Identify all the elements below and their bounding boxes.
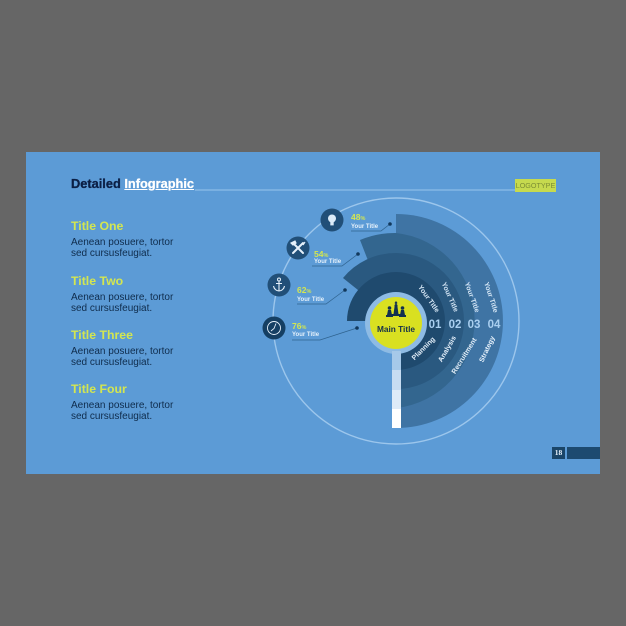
logotype badge <box>515 179 556 192</box>
heading: Detailed Infographic <box>71 176 194 191</box>
text block: title one: Title One <box>71 219 123 233</box>
ring names: Planning <box>411 336 437 362</box>
callout 54%: 54% <box>314 249 328 259</box>
ring numbers: 03 <box>468 319 480 331</box>
text block: title three: Aenean posuere, tortor <box>71 346 173 357</box>
callout 54% <box>312 249 360 266</box>
ring 04 <box>396 214 503 428</box>
callout 62%: 62% <box>297 285 311 295</box>
icon: light bulb <box>320 208 344 232</box>
center label: Main Title <box>377 324 415 334</box>
text block: title one: Aenean posuere, tortor <box>71 237 173 248</box>
ring names <box>411 335 497 375</box>
text block: title two: sed cursusfeugiat. <box>71 303 152 314</box>
logotype badge: LOGOTYPE <box>516 181 555 190</box>
ring names: Strategy <box>479 335 497 364</box>
page number: 18 <box>555 448 562 457</box>
ring 01 <box>347 272 445 370</box>
callout 54%: Your Title <box>314 259 342 265</box>
icon: tools <box>286 236 310 260</box>
page number <box>552 447 600 459</box>
ring titles: Your Title <box>463 281 480 314</box>
text block: title two: Title Two <box>71 274 123 288</box>
text block: title three: Title Three <box>71 328 133 342</box>
text block: title four: sed cursusfeugiat. <box>71 411 152 422</box>
text block: title four <box>71 382 174 422</box>
ring numbers <box>429 319 501 331</box>
callout 62%: Your Title <box>297 297 325 303</box>
orbit ring <box>273 198 519 444</box>
text block: title four: Aenean posuere, tortor <box>71 400 173 411</box>
callout 48%: 48% <box>351 212 365 222</box>
text block: title two <box>71 274 174 314</box>
icon: clock <box>262 316 286 340</box>
callout 48%: Your Title <box>351 224 379 230</box>
text block: title three <box>71 328 174 368</box>
chess icon <box>386 301 406 317</box>
callout 76%: Your Title <box>292 332 320 338</box>
radial chart <box>343 214 503 428</box>
text block: title four: Title Four <box>71 382 127 396</box>
panel: blue slide background <box>26 152 600 474</box>
text block: title two: Aenean posuere, tortor <box>71 292 173 303</box>
ring titles <box>416 281 499 314</box>
ring 03 <box>360 233 475 408</box>
callout 76% <box>292 321 359 340</box>
ring names: Recruitment <box>451 336 479 375</box>
text block: title one <box>71 219 174 259</box>
ring numbers: 04 <box>488 319 501 331</box>
icon: anchor <box>268 274 290 296</box>
ring titles: Your Title <box>440 282 459 313</box>
center disc <box>370 297 422 349</box>
center halo <box>365 292 427 354</box>
ring titles: Your Title <box>482 281 499 314</box>
callout 48% <box>351 212 392 231</box>
callout 76%: 76% <box>292 321 306 331</box>
header rule <box>195 189 515 191</box>
ring titles: Your Title <box>416 284 440 314</box>
text block: title three: sed cursusfeugiat. <box>71 357 152 368</box>
ring names: Analysis <box>437 335 458 363</box>
text block: title one: sed cursusfeugiat. <box>71 248 152 259</box>
colour strip <box>392 351 401 428</box>
ring numbers: 01 <box>429 319 442 331</box>
callout 62% <box>297 285 347 304</box>
ring numbers: 02 <box>449 319 461 331</box>
ring 02 <box>343 253 464 389</box>
